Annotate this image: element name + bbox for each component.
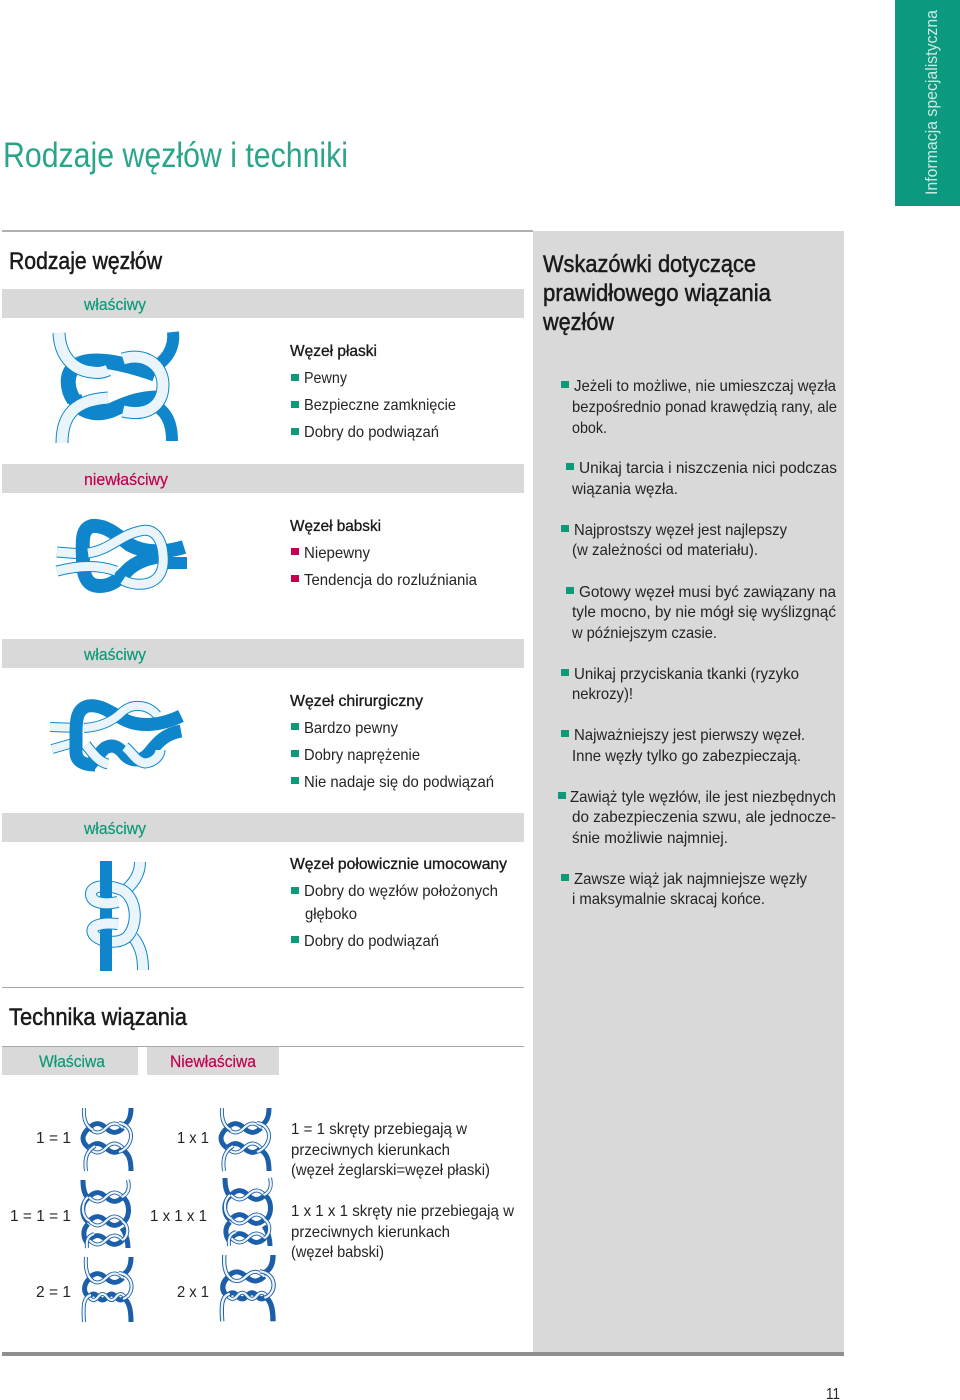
tip 2: wiązania węzła. bbox=[571, 481, 678, 498]
tip 7 bbox=[558, 789, 836, 847]
tips list bbox=[558, 378, 837, 908]
list: surgical knot: Nie nadaje się do podwiązań bbox=[304, 774, 494, 791]
list: surgical knot: Bardzo pewny bbox=[304, 720, 398, 737]
list: granny knot: Tendencja do rozluźniania bbox=[304, 572, 477, 589]
tip 5: Unikaj przyciskania tkanki (ryzyko bbox=[574, 666, 799, 683]
technique row: 1 x 1 x 1: 1 x 1 x 1 bbox=[150, 1208, 207, 1225]
panel: flat knot bbox=[2, 289, 524, 443]
icon: half-fixed knot bbox=[91, 861, 143, 971]
tip 4: Gotowy węzeł musi być zawiązany na bbox=[579, 584, 836, 601]
tip 5: nekrozy)! bbox=[572, 686, 633, 703]
tip 1: bezpośrednio ponad krawędzią rany, ale bbox=[572, 399, 837, 416]
technique row: 1 = 1: 1 = 1 bbox=[36, 1130, 71, 1147]
list: surgical knot bbox=[290, 693, 494, 791]
tip 1: Jeżeli to możliwe, nie umieszczaj węzła bbox=[574, 378, 836, 395]
panel: surgical knot bbox=[2, 639, 524, 791]
tab: correct bbox=[2, 1047, 138, 1075]
icon: granny knot bbox=[57, 526, 187, 586]
text: granny knot description: przeciwnych kierunkach bbox=[291, 1224, 450, 1241]
technique row: 2 = 1 bbox=[36, 1257, 132, 1322]
tip 3: (w zależności od materiału). bbox=[572, 542, 758, 559]
list: half-fixed knot: Węzeł połowicznie umocowany bbox=[290, 856, 507, 873]
panel: half-fixed knot: właściwy bbox=[83, 820, 147, 838]
text: reef knot description: przeciwnych kierunkach bbox=[291, 1142, 450, 1159]
technique row: 1 x 1 bbox=[177, 1108, 269, 1171]
technique row: 2 x 1: 2 x 1 bbox=[177, 1284, 209, 1301]
tip 7: Zawiąż tyle węzłów, ile jest niezbędnych bbox=[570, 789, 836, 806]
tip 8: i maksymalnie skracaj końce. bbox=[572, 891, 765, 908]
list: surgical knot: Węzeł chirurgiczny bbox=[290, 693, 423, 710]
heading: knot types: Rodzaje węzłów bbox=[9, 248, 163, 275]
heading: tying technique: Technika wiązania bbox=[9, 1004, 188, 1031]
list: half-fixed knot: Dobry do węzłów położonych bbox=[304, 883, 498, 900]
text: reef knot description: 1 = 1 skręty przebiegają w bbox=[291, 1121, 467, 1138]
technique row: 1 = 1 = 1 bbox=[10, 1180, 129, 1248]
tip 4: w późniejszym czasie. bbox=[571, 625, 717, 642]
tip 7: do zabezpieczenia szwu, ale jednocze- bbox=[572, 809, 836, 826]
list: granny knot: Węzeł babski bbox=[290, 518, 381, 535]
list: flat knot: Pewny bbox=[304, 370, 347, 387]
heading: tips: prawidłowego wiązania bbox=[543, 280, 772, 307]
icon: flat knot bbox=[59, 332, 173, 443]
panel: granny knot: niewłaściwy bbox=[84, 471, 169, 489]
tip 8 bbox=[561, 871, 807, 908]
heading: tips bbox=[542, 251, 772, 336]
list: flat knot: Węzeł płaski bbox=[290, 343, 377, 360]
list: granny knot: Niepewny bbox=[304, 545, 370, 562]
tip 4: tyle mocno, by nie mógł się wyślizgnąć bbox=[572, 604, 836, 621]
panel: granny knot bbox=[2, 464, 524, 589]
list: flat knot bbox=[290, 343, 456, 441]
text: granny knot description: 1 x 1 x 1 skręty nie przebiegają w bbox=[291, 1203, 514, 1220]
list: half-fixed knot bbox=[290, 856, 507, 950]
tip 7: śnie możliwie najmniej. bbox=[572, 830, 728, 847]
panel: flat knot: właściwy bbox=[83, 296, 147, 314]
text: granny knot description bbox=[291, 1203, 514, 1261]
tip 6: Inne węzły tylko go zabezpieczają. bbox=[572, 748, 801, 765]
technique row: 2 x 1 bbox=[177, 1255, 274, 1321]
technique row: 1 = 1 bbox=[36, 1108, 131, 1171]
tip 5 bbox=[561, 666, 799, 703]
tip 2 bbox=[566, 460, 837, 498]
technique row: 1 = 1 = 1: 1 = 1 = 1 bbox=[10, 1208, 71, 1225]
tip 2: Unikaj tarcia i niszczenia nici podczas bbox=[579, 460, 837, 477]
tip 1 bbox=[561, 378, 837, 437]
page title: Rodzaje węzłów i techniki bbox=[3, 136, 348, 175]
heading: tips: węzłów bbox=[542, 309, 615, 336]
tab: incorrect: Niewłaściwa bbox=[170, 1053, 257, 1071]
heading: tips: Wskazówki dotyczące bbox=[543, 251, 756, 278]
tab: incorrect bbox=[147, 1047, 279, 1075]
text: reef knot description: (węzeł żeglarski=węzeł płaski) bbox=[291, 1162, 490, 1179]
tab: correct: Właściwa bbox=[39, 1053, 106, 1071]
technique row: 1 x 1: 1 x 1 bbox=[177, 1130, 209, 1147]
technique row: 1 x 1 x 1 bbox=[150, 1178, 271, 1246]
tip 3: Najprostszy węzeł jest najlepszy bbox=[574, 522, 787, 539]
panel: half-fixed knot bbox=[2, 813, 524, 971]
text: reef knot description bbox=[291, 1121, 490, 1179]
tip 3 bbox=[561, 522, 787, 559]
side tab bbox=[895, 0, 960, 206]
tip 1: obok. bbox=[572, 420, 607, 437]
list: flat knot: Bezpieczne zamknięcie bbox=[304, 397, 456, 414]
list: half-fixed knot: Dobry do podwiązań bbox=[304, 933, 439, 950]
technique row: 2 = 1: 2 = 1 bbox=[36, 1284, 71, 1301]
side tab: Informacja specjalistyczna bbox=[922, 9, 941, 195]
panel: surgical knot: właściwy bbox=[83, 646, 147, 664]
bottom rule bbox=[2, 1352, 844, 1356]
list: flat knot: Dobry do podwiązań bbox=[304, 424, 439, 441]
list: granny knot bbox=[290, 518, 477, 589]
list: half-fixed knot: głęboko bbox=[305, 906, 357, 923]
panel: right tips background bbox=[533, 231, 844, 1353]
icon: surgical knot bbox=[50, 706, 181, 765]
tip 6 bbox=[561, 727, 805, 765]
tip 4 bbox=[566, 584, 836, 642]
tip 8: Zawsze wiąż jak najmniejsze węzły bbox=[574, 871, 807, 888]
tip 6: Najważniejszy jest pierwszy węzeł. bbox=[574, 727, 805, 744]
list: surgical knot: Dobry naprężenie bbox=[304, 747, 420, 764]
text: granny knot description: (węzeł babski) bbox=[291, 1244, 384, 1261]
